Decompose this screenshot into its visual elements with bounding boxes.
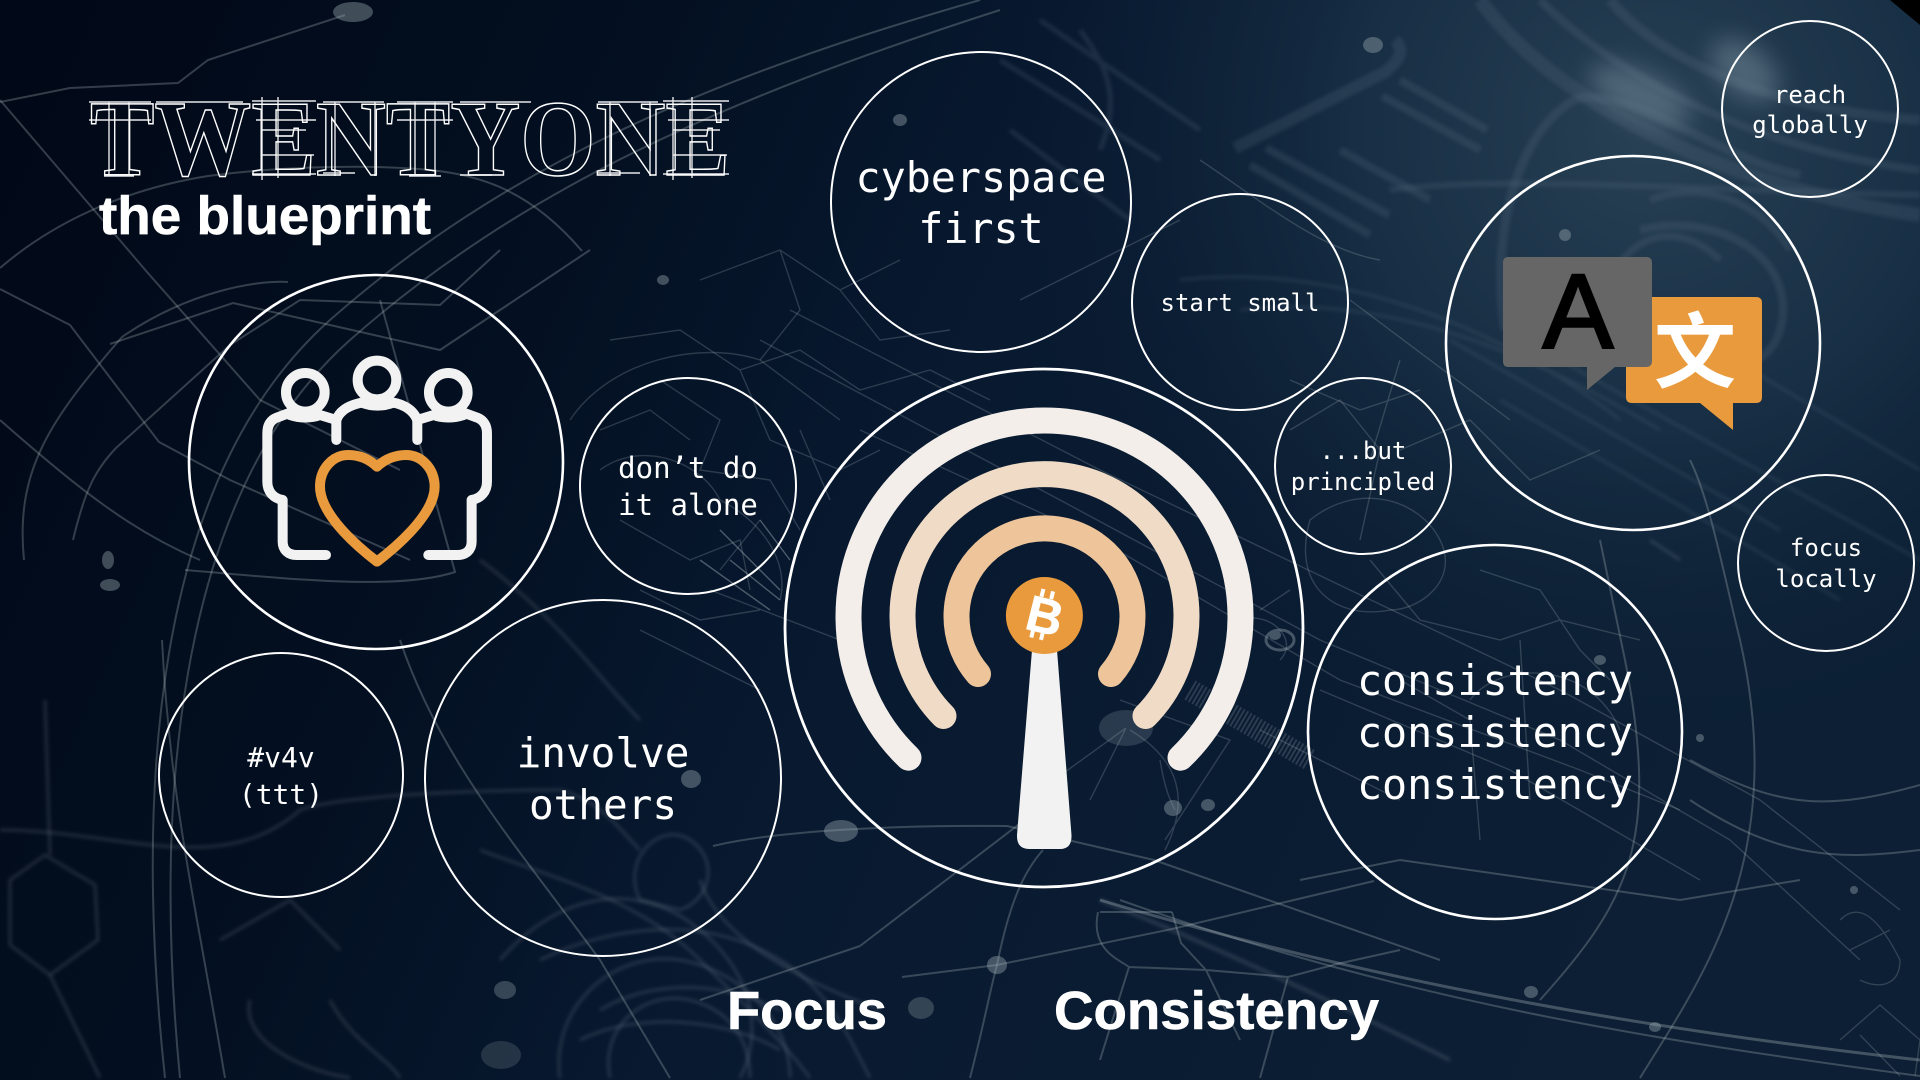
title: TWENTYONE: TWENTYONE — [90, 80, 730, 199]
circle: cyberspace first: first — [918, 204, 1044, 253]
circle: cyberspace first — [831, 52, 1131, 352]
circle: focus locally: locally — [1775, 565, 1877, 593]
circle: ...but principled: principled — [1291, 468, 1435, 496]
circle: ...but principled — [1275, 378, 1451, 554]
circle: don't do it alone: it alone — [618, 488, 758, 522]
icon: bitcoin coin — [1006, 577, 1083, 654]
label: Consistency: Consistency — [1054, 981, 1379, 1041]
circle: translate icon — [1446, 156, 1820, 530]
circle: don't do it alone — [580, 378, 796, 594]
circle: don't do it alone: don’t do — [618, 451, 758, 485]
icon: orange speech bubble: 文 — [1654, 286, 1736, 405]
icon: signal arcs — [849, 421, 1240, 758]
icon: grey speech bubble: A — [1543, 253, 1614, 371]
circle: start small: start small — [1161, 289, 1319, 317]
circle: #v4v (ttt): (ttt) — [239, 778, 323, 811]
circle: cyberspace first: cyberspace — [856, 153, 1106, 202]
subtitle: the blueprint: the blueprint — [99, 186, 431, 246]
fine mesh — [570, 160, 1920, 1076]
icon: grey speech bubble — [1503, 253, 1652, 390]
circle: consistency: consistency — [1357, 656, 1633, 705]
circle: ...but principled: ...but — [1320, 437, 1406, 465]
icon: three people with heart — [267, 361, 487, 562]
icon: bitcoin coin: B — [1021, 585, 1069, 648]
circle: focus locally — [1738, 475, 1914, 651]
circle: consistency: consistency — [1357, 708, 1633, 757]
label: Focus: Focus — [727, 981, 887, 1041]
icon: tower — [1017, 650, 1072, 849]
circle: #v4v (ttt) — [159, 653, 403, 897]
icon: orange speech bubble — [1626, 286, 1762, 430]
soft tangle — [0, 540, 1680, 1078]
circle: consistency: consistency — [1357, 760, 1633, 809]
circle: reach globally: reach — [1774, 81, 1846, 109]
circle: focus locally: focus — [1790, 534, 1862, 562]
circle: start small — [1132, 194, 1348, 410]
circle: involve others: involve — [517, 729, 689, 777]
circle: bitcoin broadcast — [785, 369, 1303, 887]
circle: family icon — [189, 275, 563, 649]
circle: #v4v (ttt): #v4v — [247, 741, 315, 774]
circle: consistency — [1308, 545, 1682, 919]
circle: involve others — [425, 600, 781, 956]
circle: reach globally: globally — [1752, 111, 1868, 139]
circle: involve others: others — [529, 781, 677, 829]
circle: reach globally — [1722, 21, 1898, 197]
